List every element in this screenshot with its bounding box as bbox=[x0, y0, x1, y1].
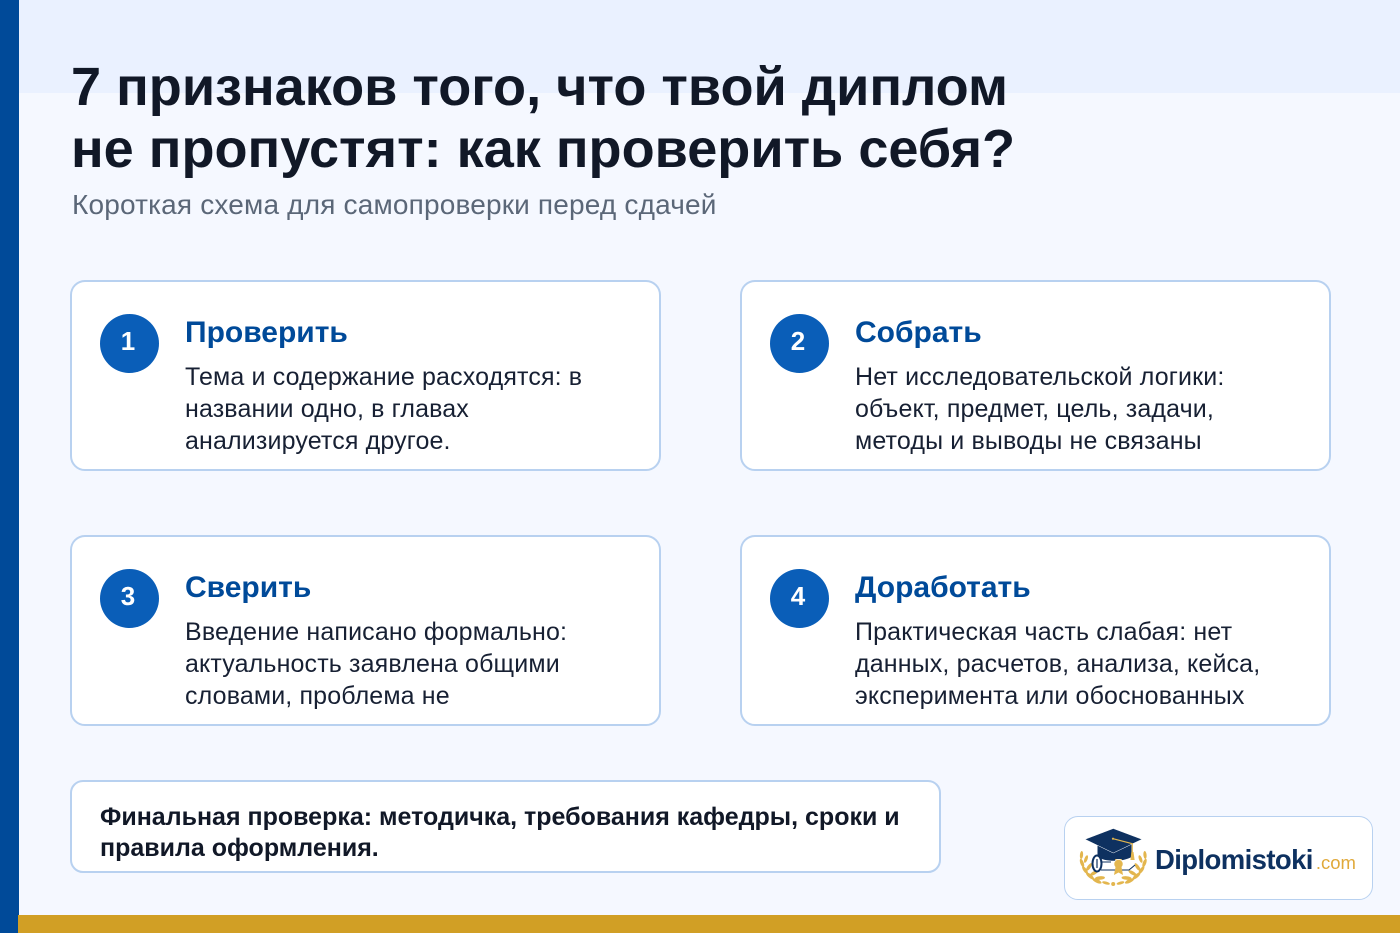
subtitle: Короткая схема для самопроверки перед сдачей bbox=[72, 189, 717, 220]
text: card 2 bbox=[855, 363, 1224, 455]
panel: card 3 bbox=[70, 535, 661, 726]
callout text: Финальная проверка: методичка, требования кафедры, сроки и bbox=[100, 803, 900, 831]
number 2: 2 bbox=[791, 326, 805, 356]
number 3 bbox=[100, 569, 159, 628]
header band bbox=[18, 0, 1400, 93]
callout: final check bbox=[70, 780, 941, 873]
text: card 4: эксперимента или обоснованных bbox=[855, 682, 1245, 710]
number 1: 1 bbox=[121, 326, 135, 356]
title: не пропустят: как проверить себя? bbox=[71, 119, 1015, 179]
text: card 1: Тема и содержание расходятся: в bbox=[185, 363, 582, 391]
left accent bar bbox=[0, 0, 19, 933]
panel: card 1 bbox=[70, 280, 661, 471]
text: card 1: анализируется другое. bbox=[185, 427, 451, 455]
text: card 3: Введение написано формально: bbox=[185, 618, 567, 646]
callout text: правила оформления. bbox=[100, 834, 379, 862]
panel: card 4 bbox=[740, 535, 1331, 726]
text: card 2: Нет исследовательской логики: bbox=[855, 363, 1224, 391]
heading: Проверить: Проверить bbox=[185, 316, 348, 349]
heading: Собрать: Собрать bbox=[855, 316, 982, 349]
bottom gold bar bbox=[18, 915, 1400, 933]
text: card 2: объект, предмет, цель, задачи, bbox=[855, 395, 1214, 423]
text: card 3: словами, проблема не bbox=[185, 682, 450, 710]
text: card 4 bbox=[855, 618, 1260, 710]
logo wordmark: Diplomistoki.com bbox=[1155, 844, 1356, 875]
heading: Доработать: Доработать bbox=[855, 571, 1031, 604]
text: card 4: Практическая часть слабая: нет bbox=[855, 618, 1232, 646]
number 3: 3 bbox=[121, 581, 135, 611]
text: card 1 bbox=[185, 363, 582, 455]
callout text bbox=[100, 803, 900, 862]
text: card 1: названии одно, в главах bbox=[185, 395, 469, 423]
number 1 bbox=[100, 314, 159, 373]
title bbox=[71, 57, 1015, 179]
text: card 4: данных, расчетов, анализа, кейса, bbox=[855, 650, 1260, 678]
number 2 bbox=[770, 314, 829, 373]
logo card bbox=[1064, 816, 1373, 900]
heading: Сверить: Сверить bbox=[185, 571, 311, 604]
panel: card 2 bbox=[740, 280, 1331, 471]
number 4: 4 bbox=[791, 581, 805, 611]
text: card 3 bbox=[185, 618, 567, 710]
text: card 2: методы и выводы не связаны bbox=[855, 427, 1202, 455]
icon: graduation cap with laurel bbox=[1080, 828, 1147, 886]
number 4 bbox=[770, 569, 829, 628]
title: 7 признаков того, что твой диплом bbox=[71, 57, 1008, 117]
text: card 3: актуальность заявлена общими bbox=[185, 650, 560, 678]
